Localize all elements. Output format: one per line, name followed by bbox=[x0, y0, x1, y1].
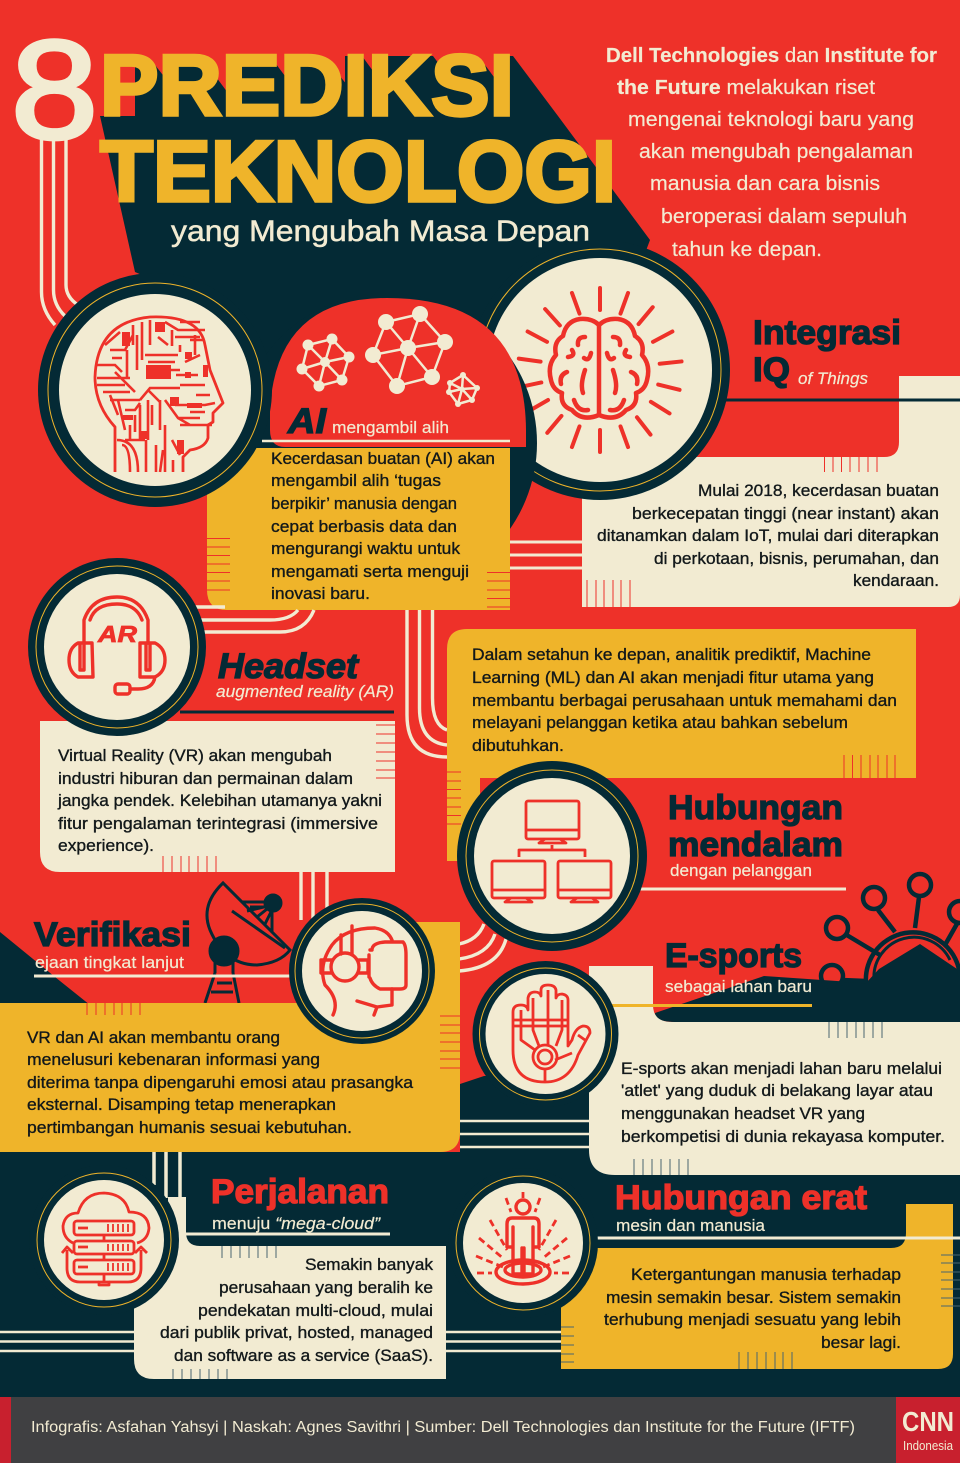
red dome with navy crescent bbox=[237, 293, 537, 593]
icon: satellite dish bbox=[205, 883, 290, 1003]
yellow text box bbox=[561, 1204, 953, 1369]
body text: Dalam setahun ke depan, analitik prediktif, Machine bbox=[472, 645, 871, 664]
icon: cyber hand in circle bbox=[472, 961, 618, 1107]
body text: experience). bbox=[58, 836, 154, 855]
cream text box bbox=[582, 376, 960, 607]
cream text box bbox=[40, 721, 395, 872]
heading: Hubungan erat bbox=[615, 1179, 867, 1217]
panel: Headset augmented reality bbox=[28, 558, 395, 872]
body text: industri hiburan dan permainan dalam bbox=[58, 769, 353, 788]
heading bbox=[287, 402, 449, 441]
heading: IQ bbox=[753, 351, 790, 389]
pipes bbox=[154, 1152, 180, 1198]
title: PREDIKSI TEKNOLOGI: PREDIKSI bbox=[100, 38, 514, 134]
icon: brain in circle bbox=[470, 240, 730, 500]
panel: Integrasi IQ of Things bbox=[582, 314, 960, 607]
icon: VR headset in circle bbox=[289, 898, 435, 1044]
body text: Kecerdasan buatan (AI) akan bbox=[271, 449, 495, 468]
intro paragraph: tahun ke depan. bbox=[672, 239, 822, 261]
icon: AR headset in circle bbox=[28, 558, 206, 736]
heading bbox=[211, 1173, 389, 1233]
panel: E-sports sebagai lahan baru bbox=[460, 937, 960, 1175]
body text: perusahaan yang beralih ke bbox=[219, 1278, 433, 1297]
body text: mengurangi waktu untuk bbox=[271, 539, 460, 558]
icon label AR: AR bbox=[97, 621, 137, 647]
title: PREDIKSI TEKNOLOGI bbox=[100, 38, 616, 220]
icon: circuit head in circle bbox=[38, 273, 272, 507]
heading: Verifikasi bbox=[34, 916, 191, 954]
body text: membantu berbagai perusahaan untuk memahami dan bbox=[472, 691, 897, 710]
body text: kendaraan. bbox=[853, 571, 939, 590]
heading: E-sports bbox=[665, 937, 802, 975]
yellow text box bbox=[207, 448, 510, 610]
body text bbox=[57, 746, 382, 855]
heading: sebagai lahan baru bbox=[665, 977, 812, 996]
cream text box bbox=[134, 1197, 446, 1379]
subtitle: yang Mengubah Masa Depan bbox=[171, 215, 590, 248]
title backdrop shape bbox=[100, 56, 650, 450]
intro paragraph: manusia dan cara bisnis bbox=[650, 173, 880, 195]
intro paragraph bbox=[606, 45, 937, 261]
body text: Virtual Reality (VR) akan mengubah bbox=[58, 746, 332, 765]
body text: mengamati serta menguji bbox=[271, 562, 469, 581]
body text: berkompetisi di dunia rekayasa komputer. bbox=[621, 1127, 945, 1146]
icon: neural network nodes bbox=[296, 306, 480, 407]
pipes between yellow box and Integrasi box bbox=[510, 542, 582, 568]
body text: terhubung menjadi sesuatu yang lebih bbox=[604, 1310, 901, 1329]
heading: Integrasi bbox=[753, 314, 901, 352]
intro paragraph: akan mengubah pengalaman bbox=[639, 141, 913, 163]
heading bbox=[753, 314, 901, 389]
body text: fitur pengalaman terintegrasi (immersive bbox=[58, 814, 378, 833]
navy background: lower section and mountain bbox=[0, 932, 960, 1397]
heading: Perjalanan bbox=[211, 1173, 389, 1211]
logo: CNN Indonesia bbox=[896, 1397, 960, 1463]
logo: CNN Indonesia: Indonesia bbox=[903, 1439, 953, 1453]
body text: di perkotaan, bisnis, perumahan, dan bbox=[654, 549, 939, 568]
pipes under the number 8 bbox=[42, 136, 78, 325]
body text: menggunakan headset VR yang bbox=[621, 1104, 865, 1123]
heading bbox=[668, 789, 843, 880]
heading: of Things bbox=[798, 369, 868, 388]
pipes above VR circle bbox=[301, 872, 327, 920]
curved pipes bbox=[459, 924, 506, 971]
body text: Learning (ML) dan AI akan menjadi fitur utama yang bbox=[472, 668, 874, 687]
body text: menelusuri kebenaran informasi yang bbox=[27, 1050, 320, 1069]
pipes from AR circle to AI box bbox=[195, 607, 314, 632]
body text: VR dan AI akan membantu orang bbox=[27, 1028, 280, 1047]
heading bbox=[34, 916, 191, 972]
body text: dibutuhkan. bbox=[472, 736, 564, 755]
heading: menuju “mega-cloud” bbox=[212, 1214, 381, 1233]
yellow text box bbox=[447, 629, 916, 861]
body text: berkecepatan tinggi (near instant) akan bbox=[632, 504, 939, 523]
body text: berpikir’ manusia dengan bbox=[271, 494, 457, 513]
pipes from AI box to yellow box bbox=[407, 610, 447, 757]
title: PREDIKSI TEKNOLOGI: TEKNOLOGI bbox=[100, 124, 616, 220]
body text: pendekatan multi-cloud, mulai bbox=[198, 1301, 433, 1320]
heading: dengan pelanggan bbox=[670, 861, 812, 880]
body text: ditanamkan dalam IoT, mulai dari diterapkan bbox=[597, 526, 939, 545]
body text: besar lagi. bbox=[821, 1333, 901, 1352]
intro paragraph: Dell Technologies dan Institute for bbox=[606, 45, 937, 67]
body text: dan software as a service (SaaS). bbox=[174, 1346, 433, 1365]
heading: mendalam bbox=[668, 826, 843, 864]
icon: virus graphic bbox=[821, 874, 960, 987]
panel: AI mengambil alih bbox=[207, 293, 537, 610]
intro paragraph: the Future melakukan riset bbox=[617, 77, 875, 99]
heading: AI bbox=[287, 402, 327, 441]
panel: Perjalanan menuju mega-cloud bbox=[0, 1152, 561, 1379]
heading: mengambil alih bbox=[332, 418, 449, 437]
body text: diterima tanpa dipengaruhi emosi atau prasangka bbox=[27, 1073, 414, 1092]
body text: Semakin banyak bbox=[305, 1255, 434, 1274]
intro paragraph: mengenai teknologi baru yang bbox=[628, 109, 914, 131]
title number 8: 8 bbox=[11, 11, 98, 168]
body text bbox=[472, 645, 897, 755]
body text: mesin semakin besar. Sistem semakin bbox=[606, 1288, 901, 1307]
body text bbox=[160, 1255, 434, 1365]
intro paragraph: beroperasi dalam sepuluh bbox=[661, 206, 907, 228]
icon: networked monitors in circle bbox=[457, 761, 647, 951]
heading bbox=[665, 937, 812, 996]
heading bbox=[216, 647, 394, 701]
panel: Verifikasi ejaan tingkat lanjut bbox=[0, 872, 460, 1152]
body text: E-sports akan menjadi lahan baru melalui bbox=[621, 1059, 942, 1078]
heading: Hubungan bbox=[668, 789, 843, 827]
heading: ejaan tingkat lanjut bbox=[35, 953, 184, 972]
body text: Ketergantungan manusia terhadap bbox=[631, 1265, 901, 1284]
body text: inovasi baru. bbox=[271, 584, 370, 603]
icon: cloud server in circle bbox=[29, 1165, 179, 1315]
panel: Hubungan mendalam bbox=[447, 629, 916, 971]
body text bbox=[27, 1028, 414, 1137]
body text: 'atlet' yang duduk di belakang layar atau bbox=[621, 1081, 933, 1100]
body text: eksternal. Disamping tetap menerapkan bbox=[27, 1095, 336, 1114]
body text bbox=[621, 1059, 945, 1146]
body text bbox=[597, 481, 939, 590]
heading bbox=[615, 1179, 867, 1235]
body text bbox=[604, 1265, 901, 1352]
body text: jangka pendek. Kelebihan utamanya yakni bbox=[57, 791, 382, 810]
body text: melayani pelanggan ketika atau bahkan sebelum bbox=[472, 713, 848, 732]
footer bbox=[0, 1397, 960, 1463]
cream text box bbox=[589, 966, 960, 1175]
body text: pertimbangan humanis sesuai kebutuhan. bbox=[27, 1118, 352, 1137]
body text: mengambil alih ‘tugas bbox=[271, 471, 441, 490]
body text: cepat berbasis data dan bbox=[271, 517, 457, 536]
credits: Infografis: Asfahan Yahsyi | Naskah: Agnes Savithri | Sumber: Dell Technologies dan Institute for the Future (IFTF) bbox=[31, 1419, 855, 1436]
body text: dari publik privat, hosted, managed bbox=[160, 1323, 433, 1342]
heading: augmented reality (AR) bbox=[216, 682, 394, 701]
heading: mesin dan manusia bbox=[616, 1216, 766, 1235]
panel: Hubungan erat mesin dan manusia bbox=[448, 1168, 960, 1369]
yellow text box bbox=[0, 922, 460, 1152]
body text bbox=[271, 449, 495, 603]
body text: Mulai 2018, kecerdasan buatan bbox=[698, 481, 939, 500]
icon: person with signals in circle bbox=[448, 1168, 598, 1318]
heading: Headset bbox=[218, 647, 359, 686]
